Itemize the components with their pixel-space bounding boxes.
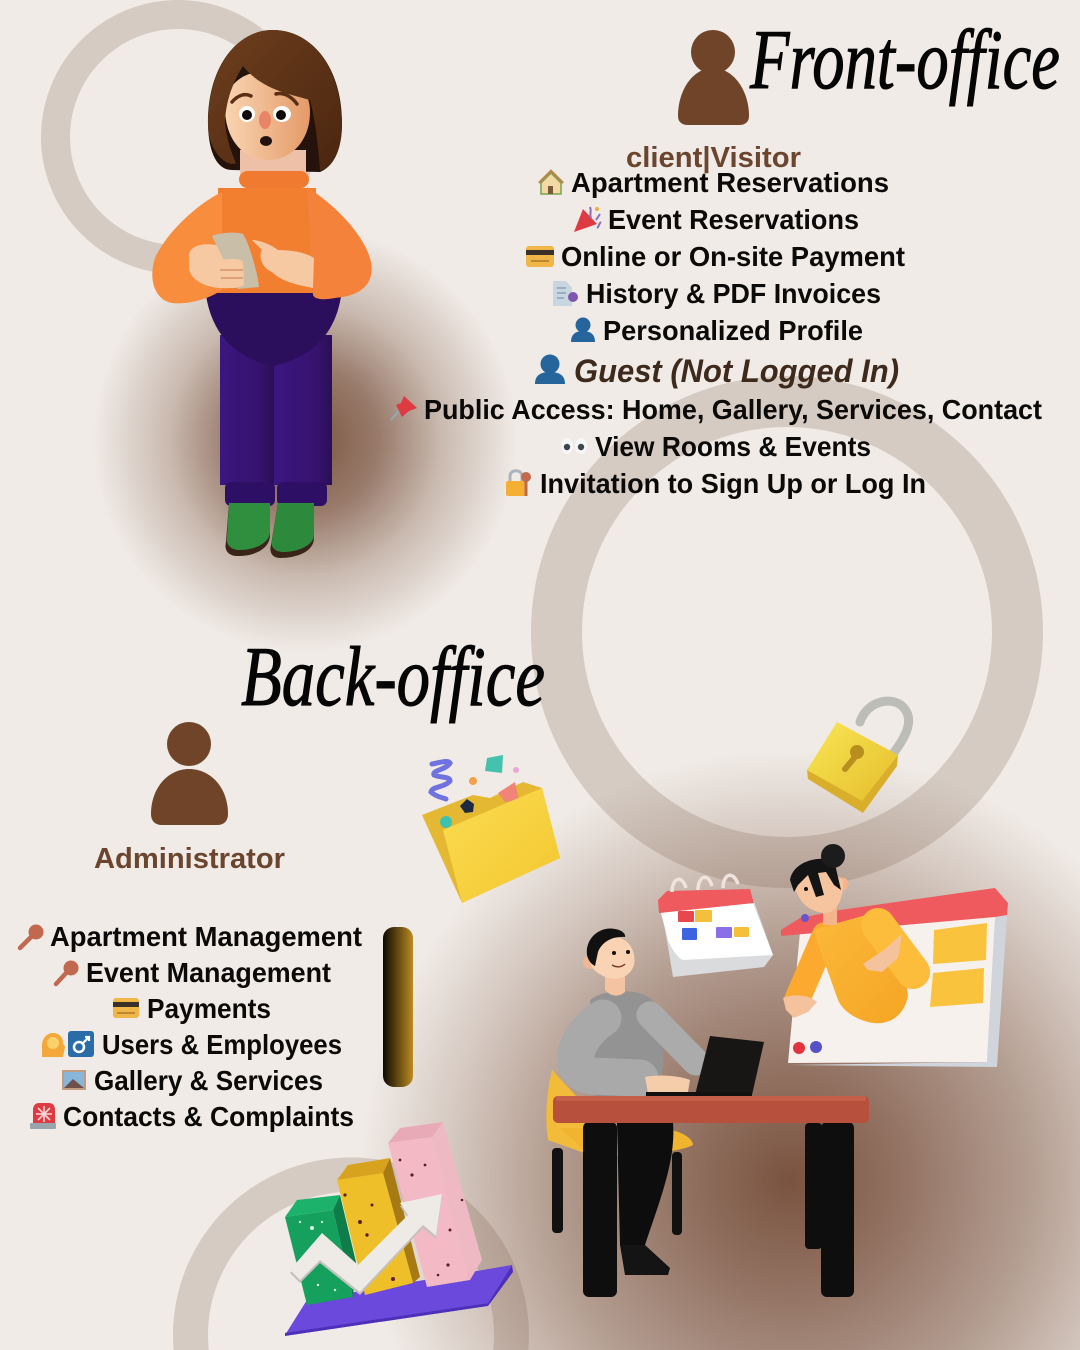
subheading: guest: Guest (Not Logged In) — [574, 353, 899, 389]
item: apartment management: Apartment Management — [50, 921, 362, 952]
icon: person (back-office) — [151, 722, 228, 825]
window panel — [781, 888, 1008, 1067]
list: front-office features — [391, 167, 1042, 499]
desk — [553, 1096, 869, 1297]
calendar — [658, 875, 773, 977]
item: apartment reservations: Apartment Reservations — [571, 167, 889, 198]
item: event reservations: Event Reservations — [608, 204, 859, 235]
man at laptop — [576, 929, 764, 1275]
item: view rooms and events: View Rooms & Events — [595, 431, 871, 462]
list: back-office features — [20, 921, 362, 1132]
chair — [546, 1070, 693, 1235]
decorative ring: bottom — [173, 1157, 529, 1350]
illustration: girl with phone — [152, 30, 372, 558]
item: contacts and complaints: Contacts & Complaints — [63, 1101, 354, 1132]
item: gallery and services: Gallery & Services — [94, 1065, 323, 1096]
item: public access: Public Access: Home, Gallery, Services, Contact — [424, 394, 1042, 425]
item: personalized profile: Personalized Profile — [603, 315, 863, 346]
woman presenting — [783, 844, 913, 1023]
decorative ring: top left — [56, 14, 300, 260]
subheading: client|Visitor: client|Visitor — [626, 142, 801, 174]
illustration: bar chart with arrow — [285, 1122, 513, 1336]
decorative ring: centre right — [556, 402, 1018, 862]
gradient vertical bar — [383, 927, 413, 1087]
item: invitation to sign up: Invitation to Sign Up or Log In — [540, 468, 926, 499]
illustration: padlock — [807, 701, 909, 813]
illustration: office scene — [546, 844, 1008, 1297]
item: payments: Payments — [147, 993, 271, 1024]
subheading: Administrator: Administrator — [94, 843, 285, 875]
shadow glow behind girl — [90, 225, 520, 655]
item: history and pdf invoices: History & PDF Invoices — [586, 278, 881, 309]
illustration: open folder with objects — [422, 755, 560, 903]
item: online or on-site payment: Online or On-site Payment — [561, 241, 905, 272]
icon: person (front-office) — [678, 30, 749, 125]
item: users and employees: Users & Employees — [102, 1029, 342, 1060]
shadow glow behind office scene — [360, 750, 1080, 1350]
item: event management: Event Management — [86, 957, 331, 988]
heading: Back-office: Back-office — [241, 630, 545, 724]
